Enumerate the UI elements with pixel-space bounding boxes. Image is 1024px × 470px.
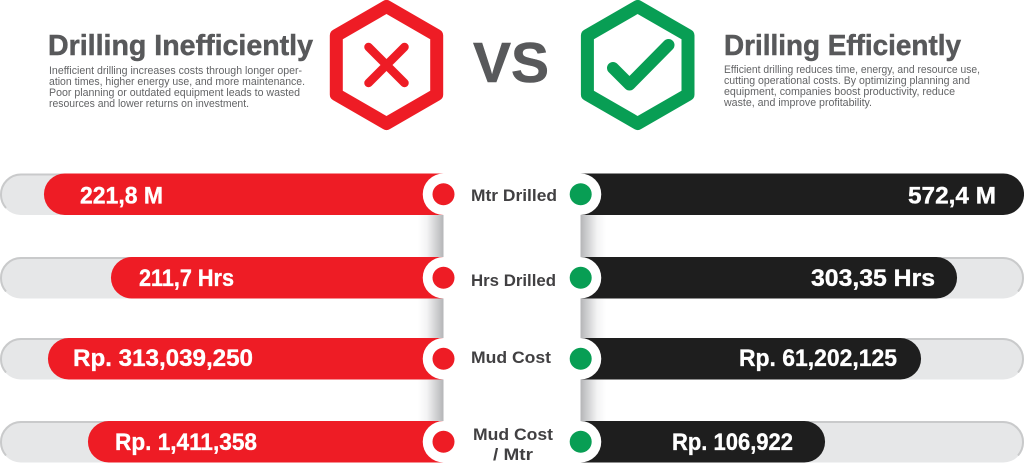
icon: red hexagon with cross [336, 6, 437, 124]
red dot [432, 183, 454, 205]
panel: inefficient drilling header [48, 30, 313, 110]
value: Rp. 61,202,125: Rp. 61,202,125 [739, 345, 897, 372]
red dot [432, 267, 454, 289]
left bar: Rp. 313,039,250 [48, 338, 445, 380]
right track [580, 421, 1024, 462]
text block: inefficient drilling description [49, 65, 305, 110]
text block: inefficient drilling description: resources and lower returns on investment. [49, 98, 249, 110]
label: Mud Cost / Mtr [473, 425, 553, 464]
center label cap [423, 336, 601, 380]
left track [0, 174, 445, 215]
label: Mtr Drilled: Mtr Drilled [471, 186, 557, 205]
panel: row Mtr Drilled [0, 172, 1024, 216]
text block: efficient drilling description: equipment, companies boost productivity, reduce [724, 86, 955, 98]
value: 221,8 M: 221,8 M [80, 182, 163, 210]
text block: efficient drilling description: cutting operational costs. By optimizing planning and [724, 75, 970, 87]
right track [580, 174, 1024, 215]
right bar: 572,4 M [578, 174, 1024, 215]
text block: efficient drilling description: Efficient drilling reduces time, energy, and resource use, [724, 64, 980, 76]
right bar: 303,35 Hrs [578, 257, 957, 298]
heading: Drilling Efficiently: Drilling Efficiently [724, 30, 961, 62]
label: Hrs Drilled: Hrs Drilled [471, 271, 556, 290]
green dot [570, 431, 592, 453]
green dot [570, 267, 592, 289]
left bar: 211,7 Hrs [111, 257, 445, 298]
heading: Drilling Inefficiently: Drilling Inefficiently [48, 30, 313, 62]
right bar: Rp. 61,202,125 [578, 338, 921, 380]
right bar: Rp. 106,922 [578, 421, 825, 462]
center label cap [423, 256, 601, 300]
center label cap [423, 172, 601, 216]
text block: efficient drilling description [723, 64, 980, 109]
green dot [570, 183, 592, 205]
label: Mud Cost: Mud Cost [471, 348, 551, 367]
value: 572,4 M: 572,4 M [908, 182, 996, 210]
text block: efficient drilling description: waste, and improve profitability. [723, 97, 872, 109]
green dot [570, 348, 592, 370]
label: Mud Cost / Mtr: / Mtr [493, 445, 533, 464]
red dot [432, 431, 454, 453]
value: Rp. 1,411,358: Rp. 1,411,358 [115, 429, 257, 456]
left track [0, 257, 445, 298]
icon: green hexagon with check mark [587, 6, 688, 124]
panel: efficient drilling header [723, 30, 980, 109]
right track [580, 257, 1024, 298]
left track [0, 421, 445, 462]
red dot [432, 348, 454, 370]
left track [0, 338, 445, 380]
center label cap [423, 420, 601, 464]
value: 303,35 Hrs: 303,35 Hrs [811, 265, 935, 292]
value: Rp. 106,922: Rp. 106,922 [672, 429, 793, 456]
text block: inefficient drilling description: ation times, higher energy use, and more maintenance. [49, 76, 305, 88]
text block: inefficient drilling description: Poor planning or outdated equipment leads to wasted [49, 87, 300, 99]
value: Rp. 313,039,250: Rp. 313,039,250 [73, 345, 253, 372]
label: Mud Cost / Mtr: Mud Cost [473, 425, 553, 444]
left bar: Rp. 1,411,358 [88, 421, 445, 462]
panel: row Mud Cost per Mtr [0, 420, 1024, 464]
right track [580, 338, 1024, 380]
value: 211,7 Hrs: 211,7 Hrs [139, 265, 234, 292]
connector shadows between rows [418, 215, 606, 421]
panel: row Hrs Drilled [0, 256, 1024, 300]
panel: row Mud Cost [0, 336, 1024, 380]
heading: VS: VS [473, 31, 549, 95]
left bar: 221,8 M [44, 174, 445, 215]
text block: inefficient drilling description: Inefficient drilling increases costs through longer oper- [49, 65, 302, 77]
